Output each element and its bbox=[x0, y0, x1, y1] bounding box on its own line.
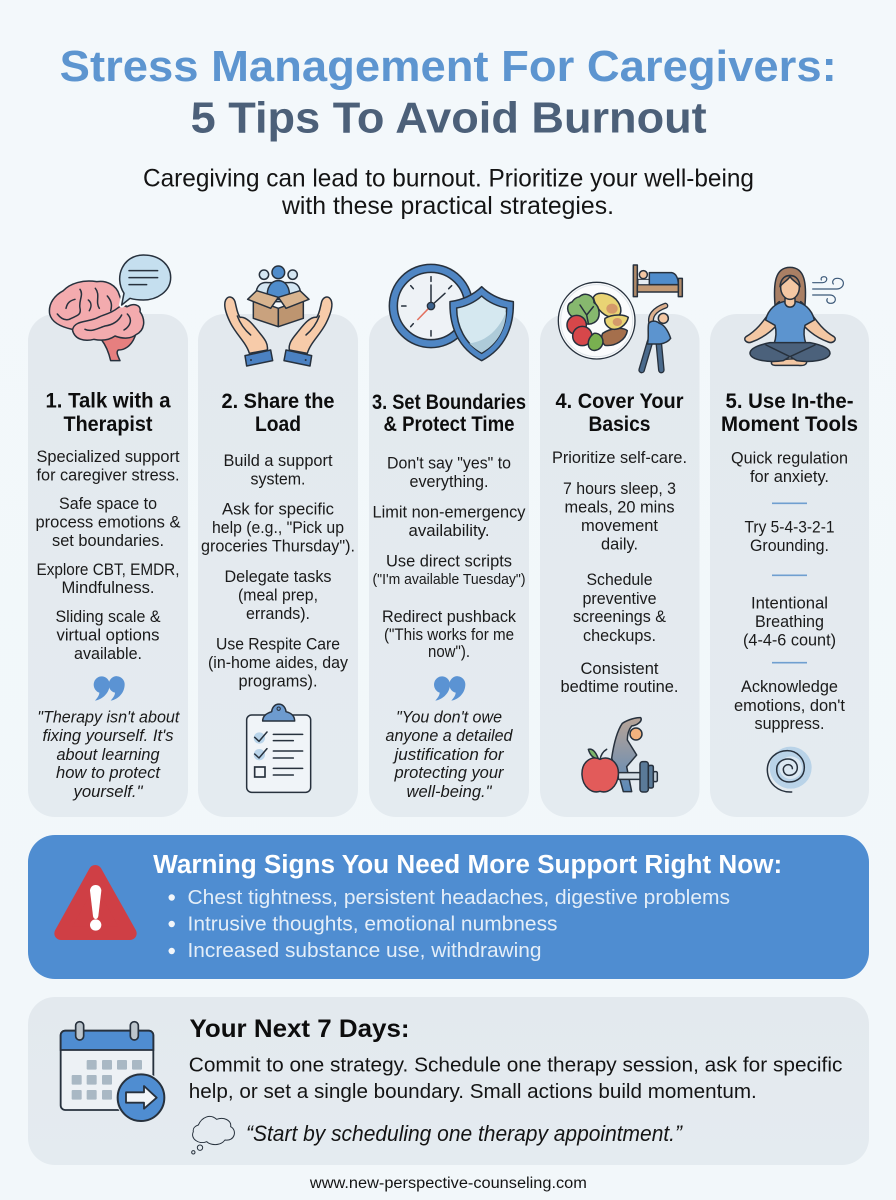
tip text: Limit non-emergency bbox=[372, 503, 526, 522]
tip text bbox=[372, 454, 526, 661]
tip text: available. bbox=[74, 644, 142, 663]
tip text: groceries Thursday"). bbox=[201, 537, 355, 556]
quote: “Start by scheduling one therapy appointment.” bbox=[246, 1121, 684, 1146]
icon: meditating woman with breath bbox=[745, 267, 835, 366]
heading bbox=[372, 391, 526, 436]
icon: hands holding a box of people bbox=[225, 266, 332, 366]
icon: quotation mark bbox=[94, 676, 125, 701]
quote: yourself." bbox=[72, 782, 144, 801]
tip text: programs). bbox=[238, 672, 318, 691]
quote: anyone a detailed bbox=[386, 726, 513, 745]
footer url: www.new-perspective-counseling.com bbox=[309, 1175, 587, 1192]
tip text: Breathing bbox=[755, 612, 824, 631]
heading: 2. Share the bbox=[222, 390, 334, 413]
panel: tip 4 cover your basics bbox=[540, 265, 700, 817]
tip text bbox=[36, 447, 180, 663]
quote: about learning bbox=[56, 745, 160, 764]
tip text: emotions, don't bbox=[734, 696, 845, 715]
tip text: daily. bbox=[601, 535, 638, 554]
quote: how to protect bbox=[56, 763, 161, 782]
icon: thought cloud bbox=[192, 1116, 234, 1154]
tip text bbox=[731, 449, 848, 733]
subtitle: with these practical strategies. bbox=[281, 192, 614, 220]
tip text: now"). bbox=[428, 642, 470, 661]
tip text: Ask for specific bbox=[222, 500, 334, 519]
tip text: Use Respite Care bbox=[216, 635, 340, 654]
heading: 4. Cover Your bbox=[556, 390, 684, 413]
heading: 1. Talk with a bbox=[46, 390, 171, 413]
tip text: Explore CBT, EMDR, bbox=[36, 560, 180, 579]
tip text: meals, 20 mins bbox=[564, 498, 674, 517]
panel: tip 3 set boundaries bbox=[369, 264, 529, 817]
tip text: Grounding. bbox=[750, 536, 829, 555]
title bbox=[60, 42, 837, 142]
tip text: ("I'm available Tuesday") bbox=[372, 572, 526, 588]
tip text: (meal prep, bbox=[238, 586, 318, 605]
body text bbox=[189, 1054, 842, 1103]
tip text: screenings & bbox=[573, 607, 666, 626]
quote: "Therapy isn't about bbox=[37, 708, 181, 727]
tip text: virtual options bbox=[56, 626, 160, 645]
icon: bed bbox=[633, 265, 682, 297]
panel: tip 2 share the load bbox=[198, 266, 358, 817]
icon: clipboard checklist bbox=[247, 704, 311, 792]
tip text: process emotions & bbox=[36, 513, 180, 532]
tip text: Prioritize self-care. bbox=[552, 448, 687, 467]
tip text: suppress. bbox=[754, 714, 824, 733]
heading: 3. Set Boundaries bbox=[372, 391, 526, 414]
icon: clock with shield bbox=[389, 264, 513, 361]
heading: Therapist bbox=[64, 413, 152, 436]
icon: calendar with arrow bbox=[61, 1022, 166, 1123]
tip text: Try 5-4-3-2-1 bbox=[744, 518, 834, 537]
tip text: Mindfulness. bbox=[62, 578, 154, 597]
tip text: availability. bbox=[408, 521, 490, 540]
heading bbox=[721, 390, 858, 436]
tip text: Intentional bbox=[751, 594, 828, 613]
tip text: help (e.g., "Pick up bbox=[212, 518, 344, 537]
tip text: system. bbox=[250, 470, 306, 488]
tip text: Sliding scale & bbox=[56, 607, 160, 626]
heading bbox=[46, 390, 171, 436]
warning list: Increased substance use, withdrawing bbox=[188, 939, 542, 962]
heading: 5. Use In-the- bbox=[726, 390, 854, 413]
warning list: Intrusive thoughts, emotional numbness bbox=[188, 912, 558, 936]
panel: warning signs bbox=[28, 835, 869, 979]
icon: warning triangle bbox=[61, 872, 130, 933]
tip text bbox=[552, 448, 687, 696]
icon: brain with speech bubble bbox=[49, 255, 171, 361]
tip text: errands). bbox=[246, 604, 310, 623]
heading bbox=[222, 390, 334, 436]
panel: your next 7 days bbox=[28, 997, 869, 1165]
heading: Load bbox=[255, 413, 301, 436]
quote: justification for bbox=[392, 745, 505, 764]
quote: fixing yourself. It's bbox=[42, 726, 174, 745]
tip text: ("This works for me bbox=[384, 625, 514, 644]
quote bbox=[37, 708, 181, 801]
icon: wind lines bbox=[813, 277, 843, 303]
heading: Your Next 7 Days: bbox=[190, 1015, 410, 1043]
heading bbox=[556, 390, 684, 436]
tip text: Build a support bbox=[224, 451, 333, 470]
tip text: (4-4-6 count) bbox=[743, 631, 836, 650]
icon: apple and dumbbell bbox=[582, 718, 657, 792]
body text: Commit to one strategy. Schedule one therapy session, ask for specific bbox=[189, 1054, 842, 1077]
tip text: Acknowledge bbox=[741, 677, 838, 696]
subtitle: Caregiving can lead to burnout. Prioritize your well-being bbox=[143, 164, 754, 192]
heading: Basics bbox=[588, 413, 650, 436]
tip text: for anxiety. bbox=[750, 467, 829, 486]
tip text: Delegate tasks bbox=[224, 567, 332, 586]
body text: help, or set a single boundary. Small actions build momentum. bbox=[189, 1080, 757, 1103]
tip text: everything. bbox=[410, 472, 488, 491]
tip text: checkups. bbox=[583, 626, 656, 645]
tip text: Quick regulation bbox=[731, 449, 848, 468]
tip text: Specialized support bbox=[36, 447, 180, 466]
tip text: set boundaries. bbox=[52, 531, 164, 550]
panel: tip 1 talk with a therapist bbox=[28, 255, 188, 817]
quote bbox=[386, 708, 513, 801]
warning list bbox=[168, 886, 730, 962]
warning list: Chest tightness, persistent headaches, digestive problems bbox=[188, 886, 730, 909]
quote: protecting your bbox=[394, 763, 505, 782]
quote: well-being." bbox=[406, 782, 493, 801]
panel: tip 5 in-the-moment tools bbox=[710, 267, 869, 817]
icon: spiral bbox=[767, 747, 812, 792]
heading: Moment Tools bbox=[721, 413, 858, 436]
tip text bbox=[201, 451, 355, 691]
tip text: Schedule bbox=[586, 570, 652, 589]
tip text: 7 hours sleep, 3 bbox=[563, 479, 676, 498]
tip text: for caregiver stress. bbox=[36, 466, 180, 485]
tip text: movement bbox=[581, 516, 658, 535]
icon: quotation mark bbox=[434, 676, 465, 701]
tip text: Use direct scripts bbox=[386, 552, 512, 571]
tip text: preventive bbox=[582, 589, 656, 608]
quote: "You don't owe bbox=[396, 708, 502, 727]
tip text: (in-home aides, day bbox=[208, 653, 349, 672]
icon: plate of food bbox=[558, 282, 635, 359]
tip text: bedtime routine. bbox=[560, 677, 678, 696]
heading: & Protect Time bbox=[384, 413, 514, 436]
title: 5 Tips To Avoid Burnout bbox=[191, 94, 707, 142]
subtitle bbox=[143, 164, 754, 220]
warning heading: Warning Signs You Need More Support Right Now: bbox=[153, 851, 782, 879]
tip text: Don't say "yes" to bbox=[387, 454, 511, 473]
tip text: Redirect pushback bbox=[382, 607, 517, 626]
tip text: Consistent bbox=[580, 659, 659, 678]
tip text: Safe space to bbox=[59, 494, 157, 513]
icon: stretching person bbox=[642, 306, 671, 370]
title: Stress Management For Caregivers: bbox=[60, 42, 837, 91]
